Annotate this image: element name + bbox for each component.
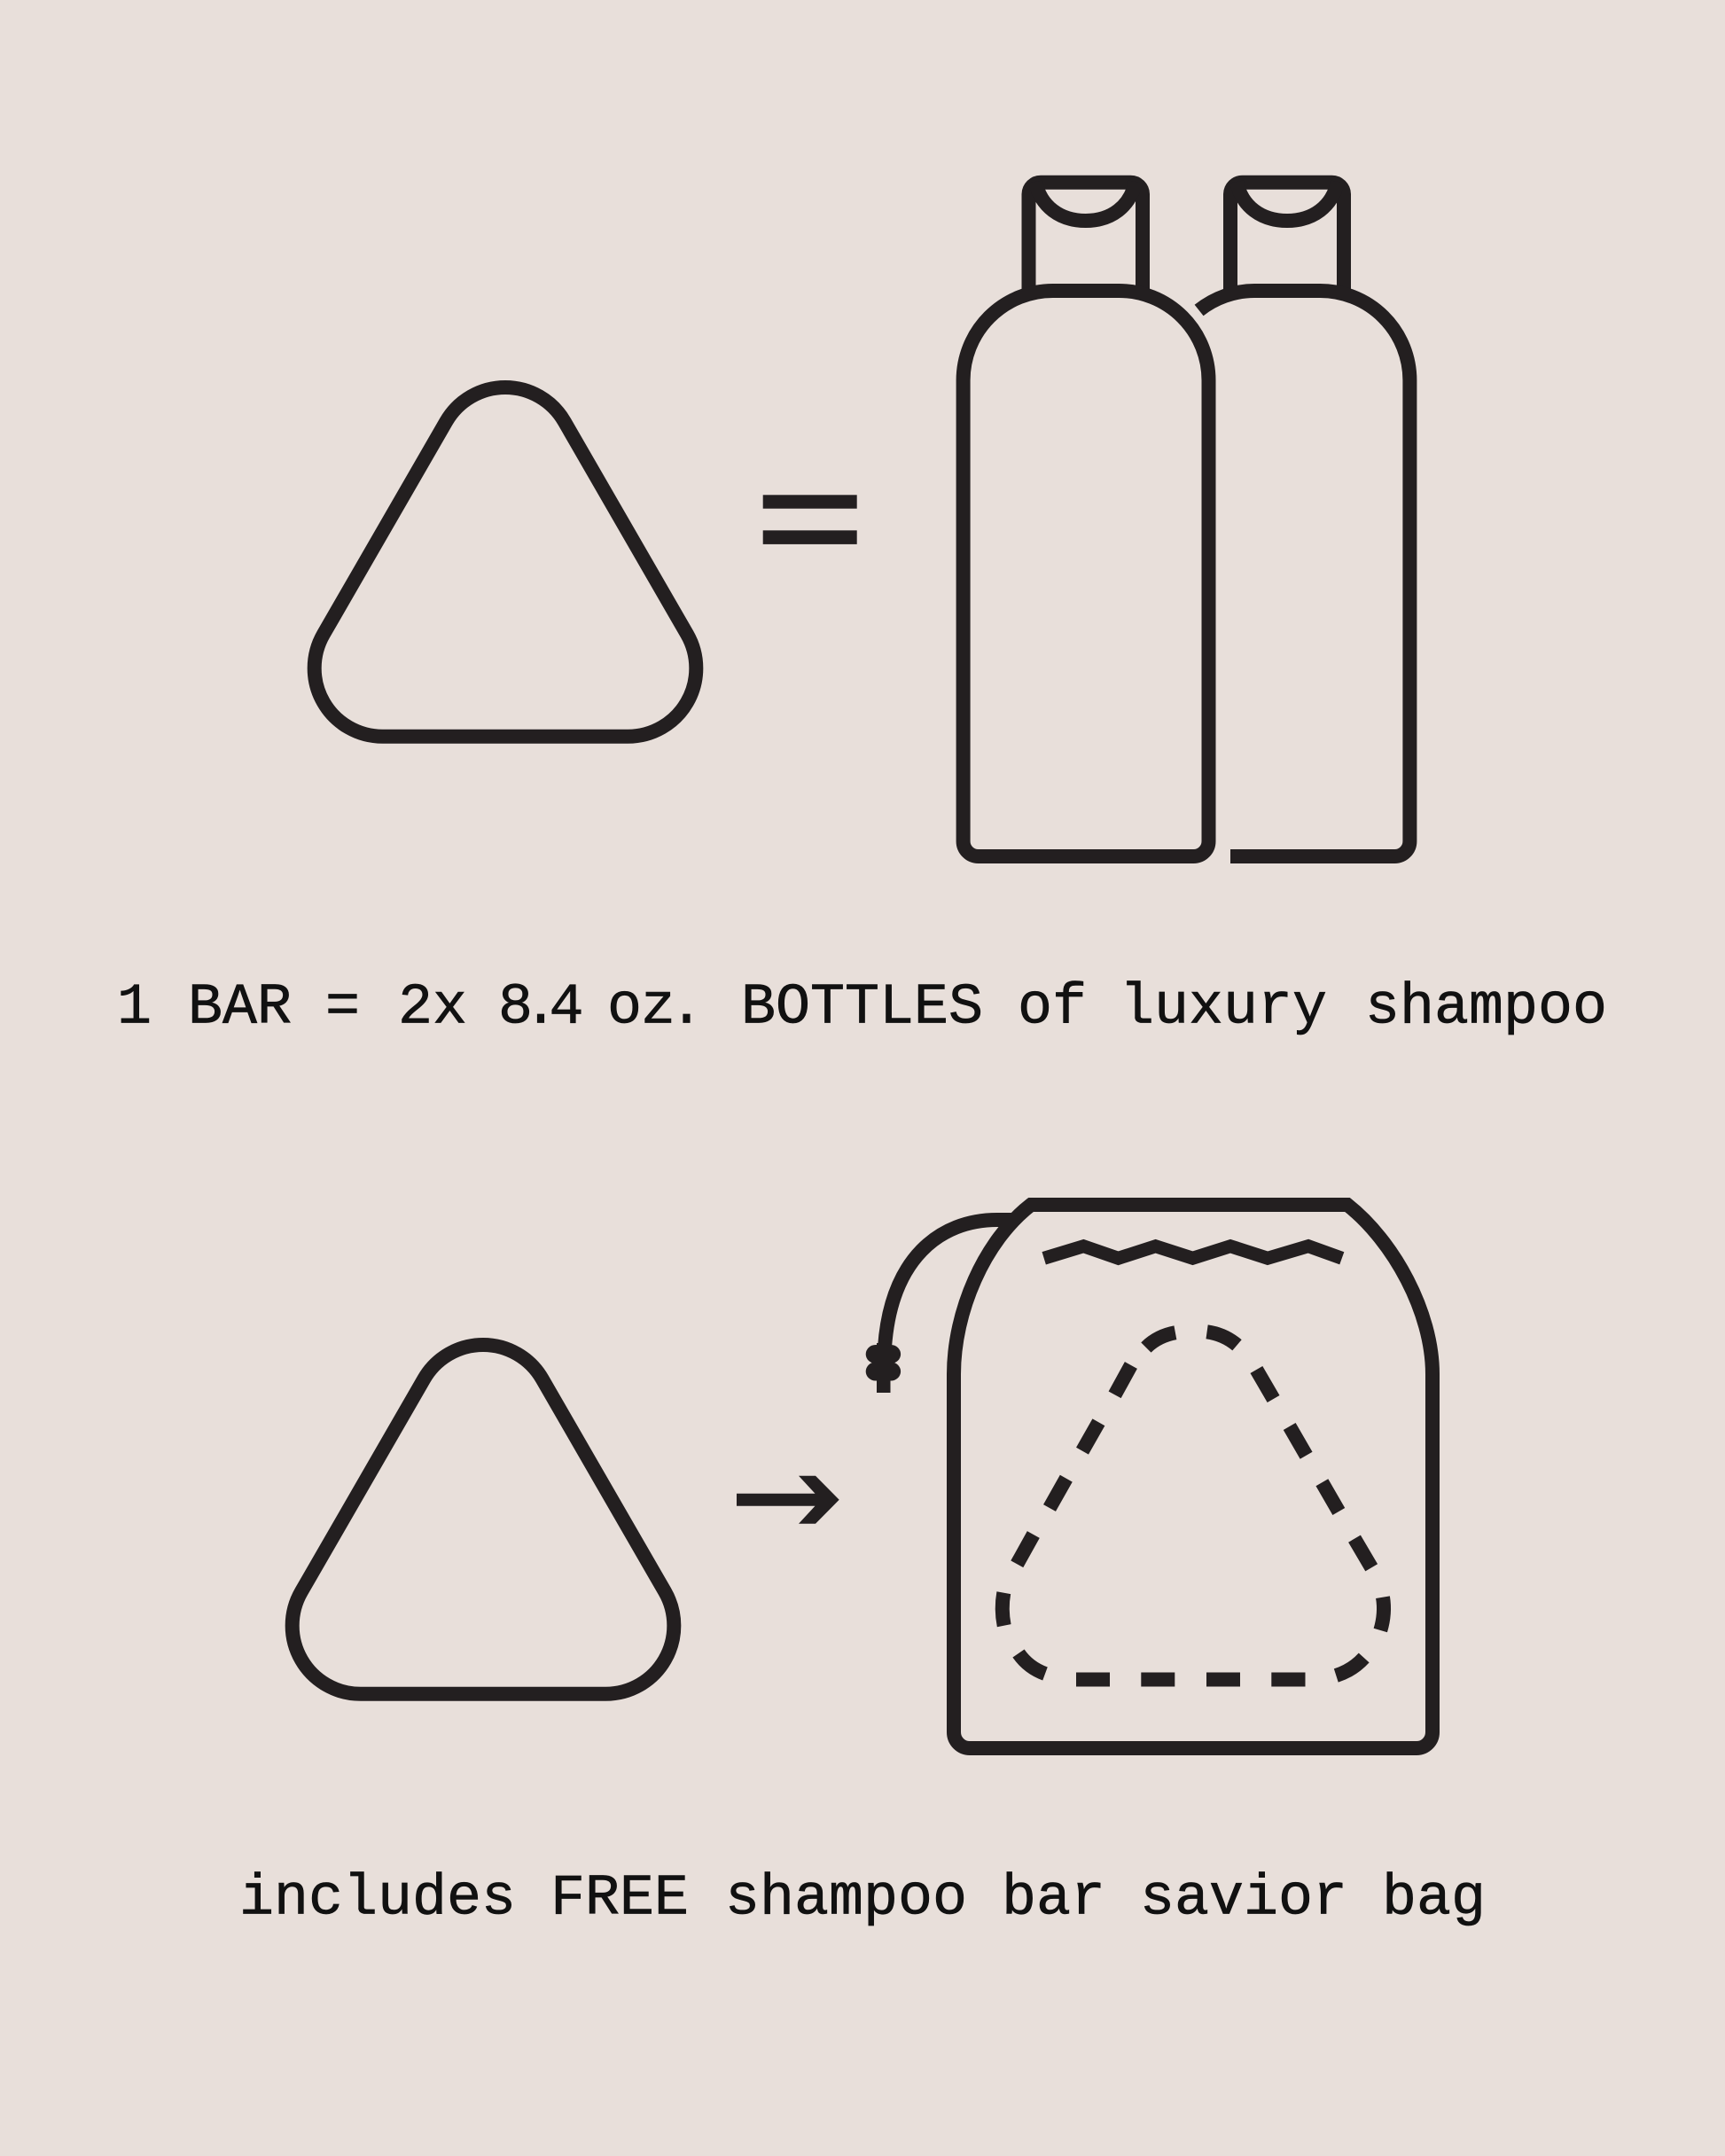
text: bar equals bottles caption: BOTTLES <box>741 974 983 1040</box>
front bottle <box>964 182 1209 856</box>
text: free bag caption: savior <box>1140 1865 1347 1931</box>
icon: shampoo bar (top) <box>315 387 696 737</box>
text: bar equals bottles caption <box>117 974 1607 1040</box>
text: free bag caption: bar <box>1002 1865 1105 1931</box>
icon: shampoo bar (bottom) <box>293 1345 674 1694</box>
text: bar equals bottles caption: BAR <box>188 974 292 1040</box>
text: bar equals bottles caption: 2x <box>398 974 467 1040</box>
text: bar equals bottles caption: luxury <box>1120 974 1327 1040</box>
text: bar equals bottles caption: z <box>641 974 675 1040</box>
text: bar equals bottles caption: = <box>325 974 360 1040</box>
text: free bag caption: shampoo <box>725 1865 967 1931</box>
text: free bag caption: FREE <box>550 1865 689 1931</box>
text: bar equals bottles caption: . <box>523 974 558 1040</box>
back bottle <box>1199 182 1409 856</box>
dashed bar outline inside bag <box>1003 1332 1384 1679</box>
text: free bag caption <box>239 1865 1486 1931</box>
drawstring gather zigzag <box>1044 1246 1342 1258</box>
icon: arrow <box>737 1476 839 1524</box>
text: bar equals bottles caption: 4 <box>550 974 584 1040</box>
drawstring knot <box>866 1343 901 1393</box>
text: bar equals bottles caption: 1 <box>117 974 152 1040</box>
bag outline <box>954 1205 1432 1748</box>
text: bar equals bottles caption: . <box>669 974 704 1040</box>
icon: two shampoo bottles <box>964 182 1409 856</box>
text: bar equals bottles caption: o <box>607 974 642 1040</box>
text: free bag caption: bag <box>1382 1865 1486 1931</box>
text: free bag caption: includes <box>239 1865 516 1931</box>
text: bar equals bottles caption: shampoo <box>1365 974 1607 1040</box>
text: bar equals bottles caption: of <box>1018 974 1087 1040</box>
drawstring <box>885 1220 1016 1348</box>
icon: equals sign <box>763 495 857 544</box>
icon: savior bag <box>866 1205 1432 1748</box>
text: bar equals bottles caption: 8 <box>498 974 533 1040</box>
